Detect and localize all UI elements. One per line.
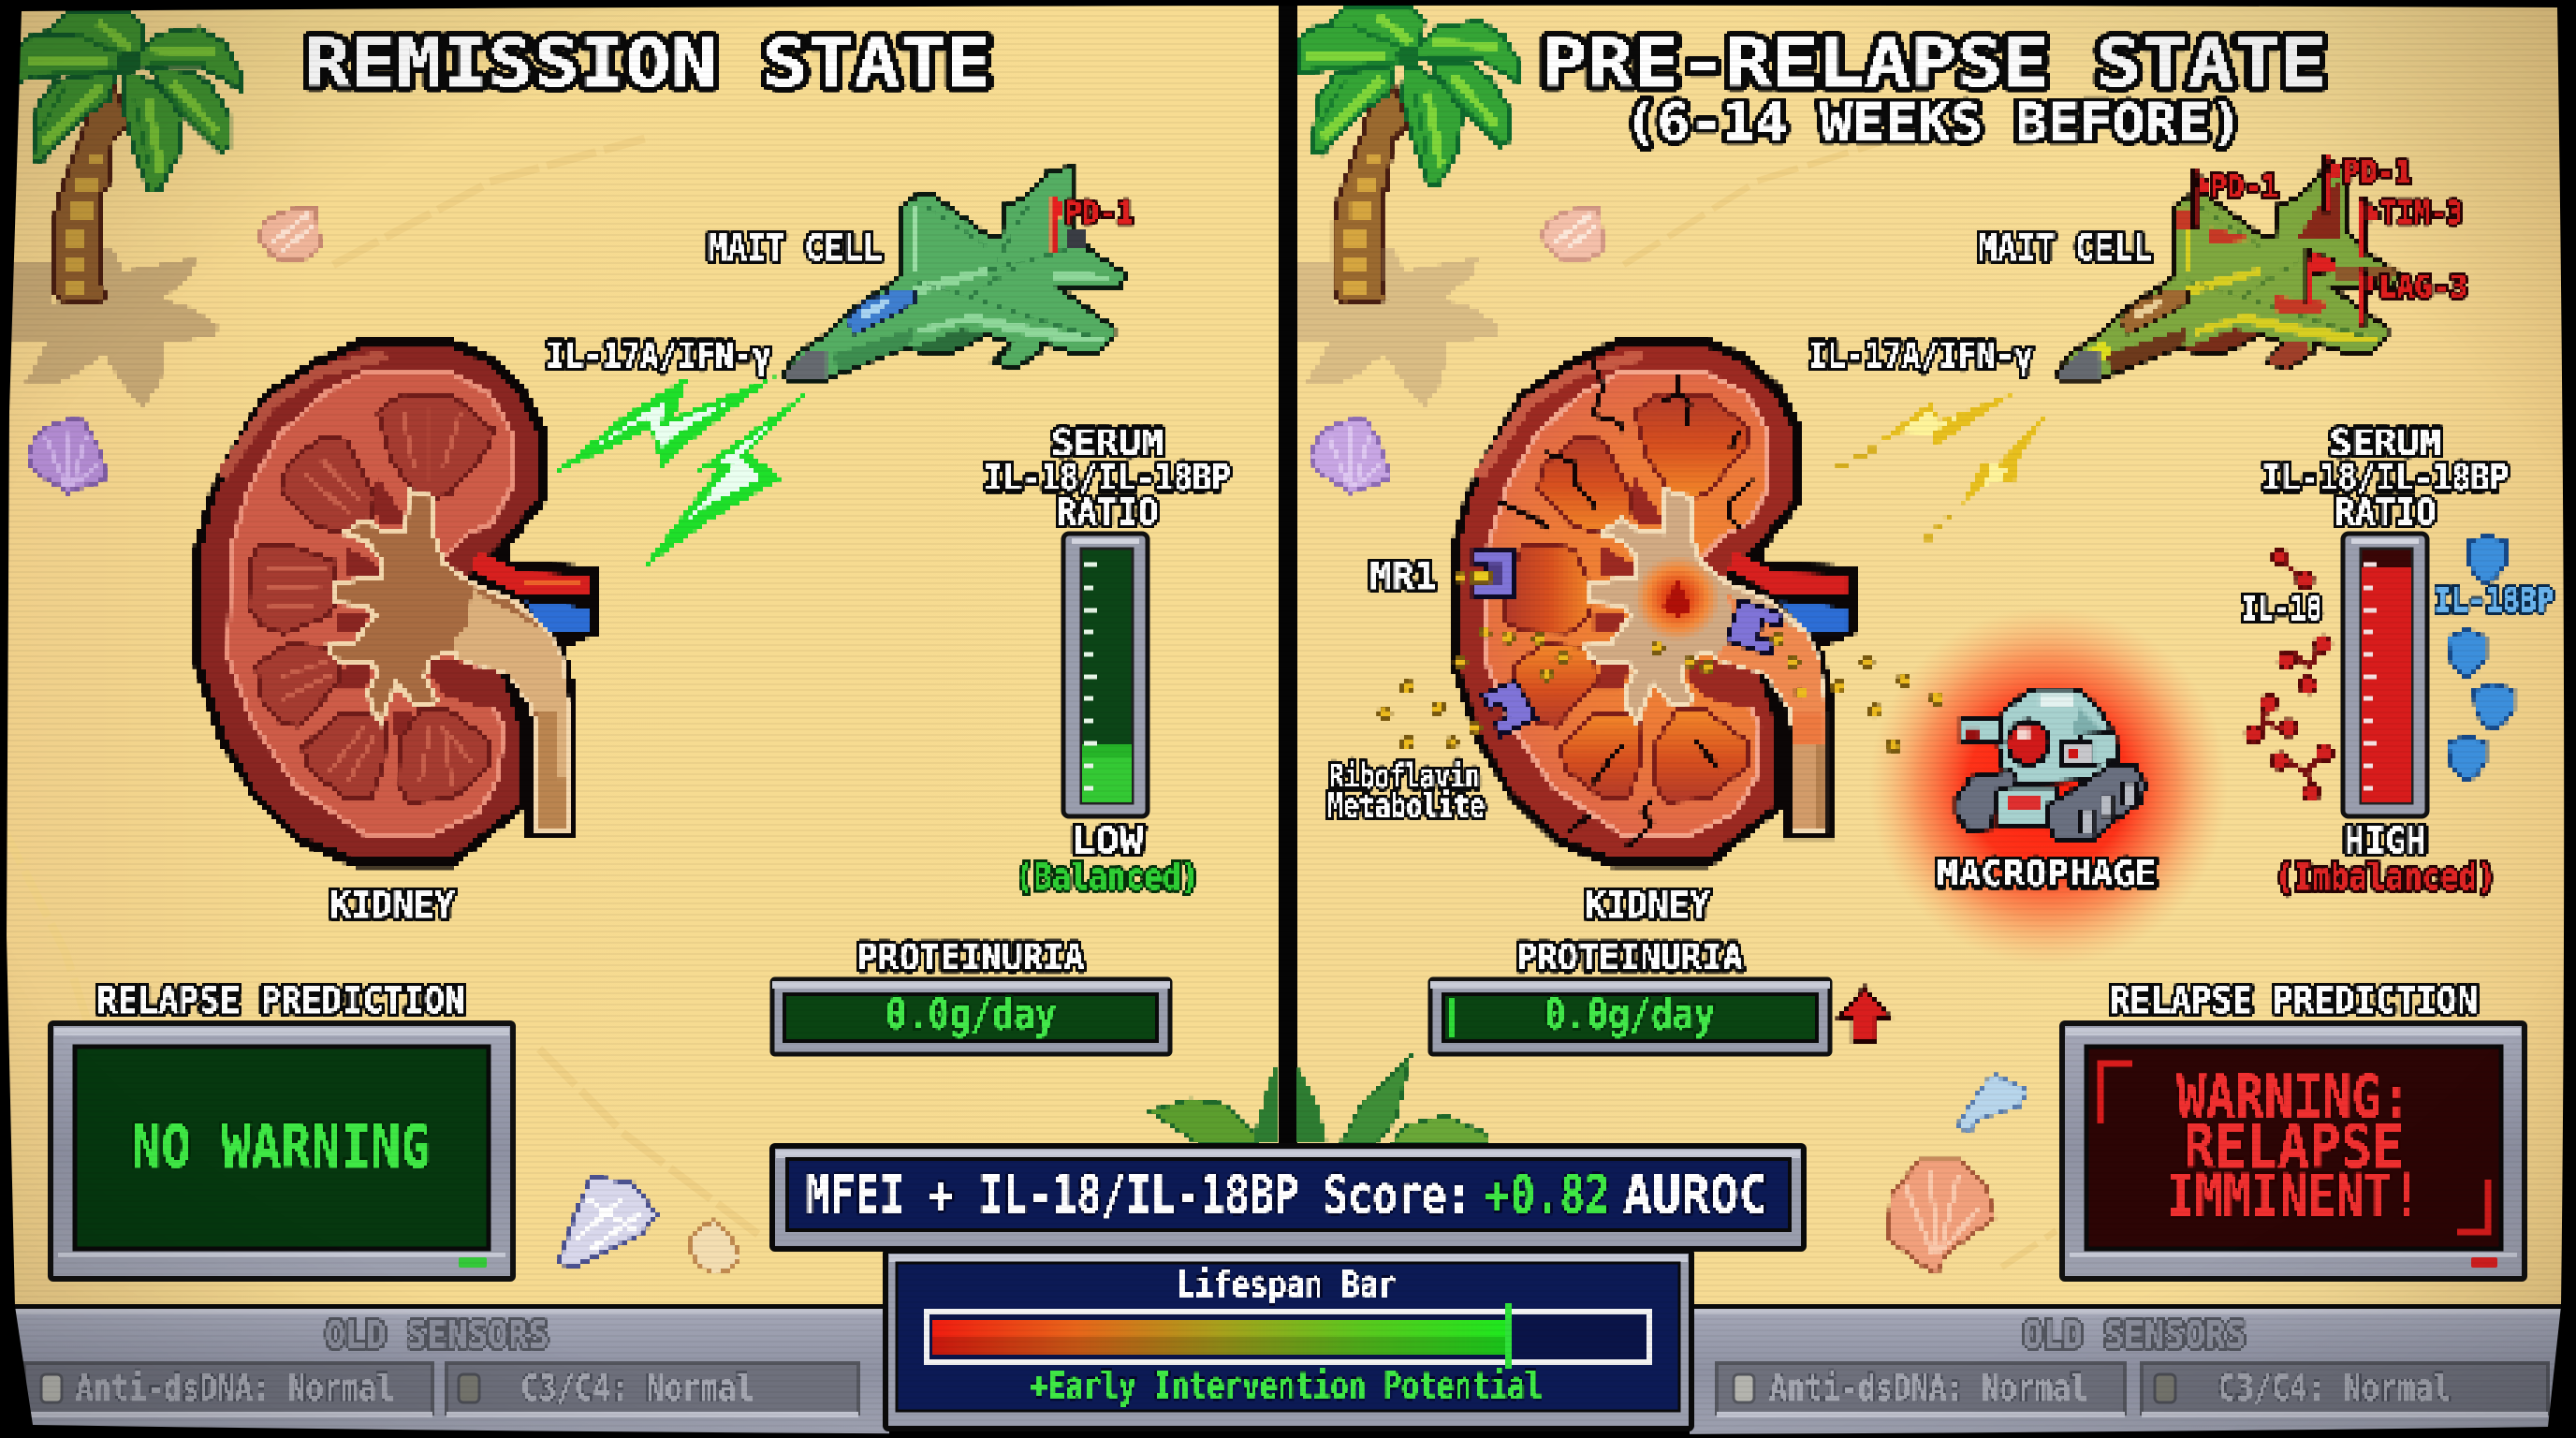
label: cytokines: IL-17A/IFN-γ [547,335,771,377]
label: relapse prediction: RELAPSE PREDICTION [97,979,465,1021]
right panel text: Metabolite [1327,786,1486,825]
label: anti-dsDNA: Anti-dsDNA: Normal [76,1368,394,1410]
right panel text: RATIO [2334,492,2437,534]
right panel text [1327,24,2554,1410]
bottom bar left [0,1304,889,1438]
sensor chip anti-dsDNA [1717,1363,2125,1417]
lifespan text [1030,1264,1543,1408]
label: proteinuria: PROTEINURIA [857,937,1084,979]
sand background left [0,0,1279,1311]
label: serum ratio: SERUM [2330,422,2441,464]
icon: pink shell [259,207,320,260]
score text: MFEI + IL-18/IL-18BP Score: [806,1165,1471,1225]
icon: inflamed kidney [1451,339,1856,868]
label: IL-18: IL-18 [2242,590,2322,628]
score text: AUROC [1623,1165,1767,1225]
right panel text: IL-18/IL-18BP [2262,457,2509,499]
icon: PD-1 flag [1050,198,1063,253]
sensor chip C3/C4 [2142,1363,2548,1417]
label: PD-1: PD-1 [1064,195,1134,231]
lifespan bar box [886,1251,1691,1429]
serum ratio gauge high [2343,534,2427,816]
lifespan text: +Early Intervention Potential [1030,1364,1543,1408]
icon: bottom center palm [1150,1058,1488,1144]
score box [772,1146,1804,1249]
label: proteinuria: PROTEINURIA [1516,937,1743,979]
sensor chip anti-dsDNA [24,1363,432,1417]
icon: kidney [194,339,600,868]
inflamed pyramids [1505,393,1749,802]
icon: macrophage robot [1956,689,2145,842]
warning corners [2100,1064,2488,1232]
macrophage glow [1868,607,2228,966]
icon: purple shell [1311,420,1390,493]
indicator light [2471,1257,2497,1268]
pelvis and ureter [328,491,568,830]
MR1 receptors [1473,551,1515,597]
label: balanced: (Balanced) [1016,857,1199,899]
dark wedges [1593,477,1769,710]
icon: palm tree [19,12,241,304]
value: warning: WARNING: [2177,1063,2410,1132]
label: LAG-3: LAG-3 [2378,269,2467,305]
label: kidney: KIDNEY [330,885,456,927]
bottom bar right [1690,1304,2576,1438]
sand background right [1297,0,2576,1311]
heading: old sensors: OLD SENSORS [326,1313,549,1357]
panel: pre-relapse state [1291,0,2576,1438]
label: relapse prediction: RELAPSE PREDICTION [2110,979,2478,1021]
label: PD-1 upper: PD-1 [2343,154,2411,190]
proteinuria display left [772,979,1170,1054]
icon: IL-18BP shields [2448,536,2513,781]
icon: palm tree [1298,6,1520,304]
icon: exhaustion flags [2192,154,2378,326]
intervention marker [1505,1303,1512,1369]
monitor: relapse prediction right [2062,1023,2525,1279]
center divider [1279,0,1297,1147]
label: C3/C4: C3/C4: Normal [520,1368,754,1410]
icon: exhausted MAIT cell jet [2057,168,2400,379]
label: anti-dsDNA: Anti-dsDNA: Normal [1769,1368,2088,1410]
artery and vein [472,551,590,596]
icon: riboflavin metabolite dots [1379,572,1942,752]
icon: orange shell [1888,1160,1995,1273]
panel: remission state [0,0,1279,1438]
label: high: HIGH [2345,820,2426,862]
value: proteinuria: 0.0g/day [1544,990,1715,1039]
icon: IL-18 molecules [2246,550,2333,800]
title: PRE-RELAPSE STATE [1541,24,2326,101]
proteinuria level sliver [1449,998,1455,1037]
label: MAIT cell: MAIT CELL [1978,227,2152,269]
inflammation core [1634,555,1720,641]
heading: old sensors: OLD SENSORS [2023,1313,2246,1357]
icon: blue shell [1957,1075,2027,1132]
value: no warning: NO WARNING [131,1111,431,1181]
label: PD-1 lower: PD-1 [2210,169,2278,205]
palm shadow [9,246,218,406]
lifespan text: Lifespan Bar [1177,1264,1397,1306]
label: kidney: KIDNEY [1586,885,1711,927]
icon: white shell [559,1177,657,1267]
pelvis and ureter [1585,491,1825,830]
label: MAIT cell: MAIT CELL [708,227,882,269]
right panel text: RELAPSE [2184,1111,2404,1181]
left panel text [76,24,1231,1410]
right panel text: IMMINENT! [2167,1161,2420,1230]
label: IL-18BP: IL-18BP [2434,581,2554,620]
label: macrophage: MACROPHAGE [1937,853,2157,895]
sensor chip C3/C4 [446,1363,858,1417]
right panel pixel art [1291,6,2513,1273]
value: proteinuria: 0.0g/day [886,990,1057,1039]
indicator light [459,1257,487,1268]
label: cytokines: IL-17A/IFN-γ [1808,335,2033,377]
monitor: relapse prediction left [51,1023,513,1279]
icon: tan shell [690,1221,739,1273]
score text: +0.82 [1486,1165,1610,1225]
label: MR1: MR1 [1370,555,1436,597]
lifespan bar [927,1303,1649,1369]
icon: MAIT cell jet [784,168,1126,379]
label: imbalanced: (Imbalanced) [2276,857,2496,899]
label: TIM-3: TIM-3 [2380,195,2463,231]
icon: up arrow [1840,988,1889,1042]
serum ratio gauge low [1063,534,1148,816]
icon: green lightning [552,376,813,568]
cracks [1500,354,1753,848]
title: REMISSION STATE [305,24,991,101]
label: low: LOW [1071,820,1144,862]
left panel pixel art [9,12,1126,1273]
pyramids [248,393,493,802]
label: C3/C4: C3/C4: Normal [2217,1368,2452,1410]
label: serum ratio: SERUM [1051,422,1164,464]
palm shadow [1291,246,1500,406]
left panel text: RATIO [1057,492,1158,534]
dark wedges [337,477,513,736]
icon: yellow lightning [1837,393,2049,541]
proteinuria display right [1430,979,1830,1054]
icon: pink shell [1543,207,1603,260]
icon: purple shell [28,420,107,493]
artery and vein [1728,551,1847,596]
label: riboflavin metabolite: Riboflavin [1329,757,1480,796]
subtitle: (6-14 WEEKS BEFORE) [1625,92,2243,152]
left panel text: IL-18/IL-18BP [984,457,1231,499]
